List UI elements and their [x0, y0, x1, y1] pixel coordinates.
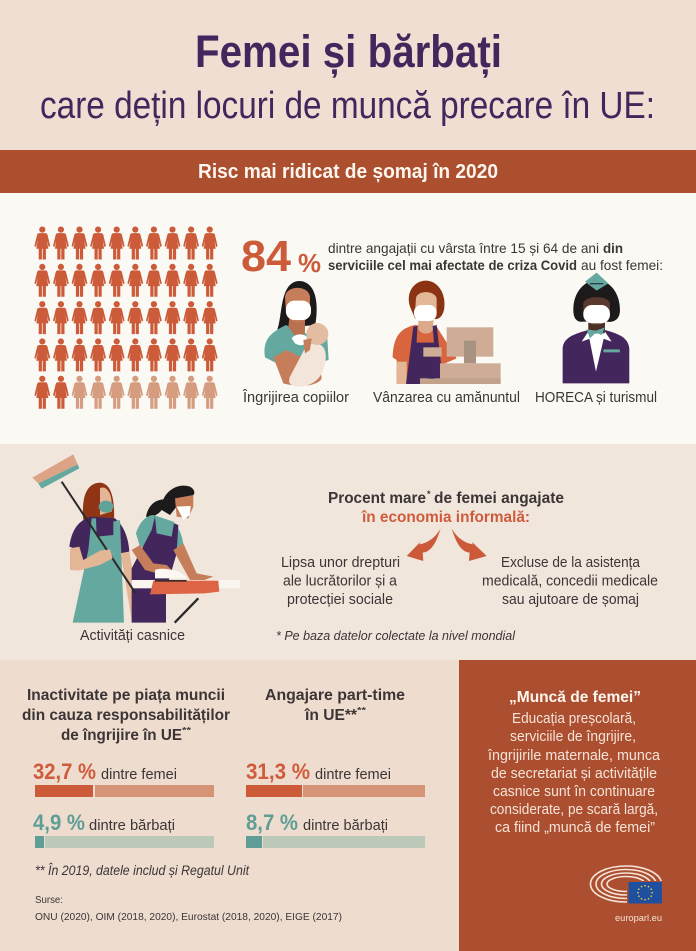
footnote: worldwide data: * Pe baza datelor colectate la nivel mondial: [276, 628, 516, 643]
heading: women's work: „Muncă de femei”: [509, 689, 641, 706]
arrow: right: [452, 528, 487, 561]
stat: inactive women 32,7 %: dintre femei: [101, 766, 177, 783]
text: excluded from medical support: [482, 555, 658, 608]
body text: ca fiind „muncă de femei”: [495, 820, 655, 836]
illustration: domestic workers: [32, 454, 240, 623]
sources: [35, 894, 342, 923]
body text: considerate, pe scară largă,: [490, 802, 658, 818]
body text: casnice sunt în continuare: [493, 784, 655, 800]
stat: part-time women 31,3 %: 31,3 %: [246, 759, 310, 784]
heading: informal economy: [328, 489, 564, 526]
heading: informal economy: în economia informală:: [361, 509, 530, 526]
icon labels: Îngrijirea copiilor: [242, 389, 349, 406]
body text: [487, 711, 661, 836]
heading: part-time employment: [265, 687, 405, 724]
big number 84 %: [241, 232, 321, 281]
icon labels: [242, 389, 657, 406]
logo: European Parliament: [590, 866, 663, 924]
stat: inactive men 4,9 %: [33, 810, 214, 848]
text: excluded from medical support: medicală, concedii medicale: [482, 574, 658, 590]
heading: informal economy: Procent mare: [328, 490, 426, 507]
caption: domestic activities: Activități casnice: [80, 628, 185, 644]
big number 84 %: %: [298, 248, 321, 278]
arrow: left: [407, 528, 441, 561]
heading: inactivity: Inactivitate pe piața muncii: [27, 687, 225, 704]
panel: statistics: [0, 660, 459, 951]
stat: part-time men 8,7 %: [246, 810, 425, 848]
panel: women's work: [459, 660, 696, 951]
statement text: [328, 240, 663, 273]
heading: inactivity: din cauza responsabilităților: [22, 707, 230, 724]
text: lack of rights: Lipsa unor drepturi: [281, 555, 400, 571]
heading: informal economy: *: [427, 489, 431, 499]
statement text: din: [603, 240, 623, 256]
stat: part-time women 31,3 %: dintre femei: [315, 766, 391, 783]
text: excluded from medical support: Excluse de la asistența: [501, 555, 641, 571]
title line 1: Femei și bărbați: [195, 26, 502, 77]
panel: 84 percent section: [0, 193, 696, 444]
heading: part-time employment: în UE**: [304, 707, 358, 724]
pictogram: 100 women, 84 highlighted: [34, 226, 218, 409]
statement text: dintre angajații cu vârsta între 15 și 64 de ani: [328, 240, 599, 256]
stat: inactive women 32,7 %: 32,7 %: [33, 759, 96, 784]
body text: de secretariat și activitățile: [491, 766, 657, 782]
text: lack of rights: protecției sociale: [287, 592, 393, 608]
banner: risk heading: Risc mai ridicat de șomaj în 2020: [198, 161, 498, 183]
panel: informal economy section: [0, 444, 696, 660]
sources: Surse:: [35, 894, 63, 906]
heading: inactivity: de îngrijire în UE: [61, 727, 182, 744]
body text: Educația preșcolară,: [512, 711, 636, 727]
text: lack of rights: [281, 555, 400, 608]
logo: European Parliament: europarl.eu: [615, 913, 662, 924]
big number 84 %: 84: [241, 232, 292, 281]
body text: serviciile de îngrijire,: [510, 729, 636, 745]
text: excluded from medical support: sau ajutoare de șomaj: [502, 592, 639, 608]
icon: childcare worker holding baby: [264, 281, 329, 387]
statement text: au fost femei:: [581, 257, 663, 273]
heading: inactivity: **: [182, 726, 192, 735]
stat: part-time women 31,3 %: [246, 759, 425, 797]
heading: informal economy: de femei angajate: [434, 490, 564, 507]
statement text: serviciile cel mai afectate de criza Covid: [328, 257, 577, 273]
text: lack of rights: ale lucrătorilor și a: [283, 574, 398, 590]
panel: title header: [0, 0, 696, 150]
stat: inactive men 4,9 %: dintre bărbați: [89, 817, 175, 834]
sources: ONU (2020), OIM (2018, 2020), Eurostat (2018, 2020), EIGE (2017): [35, 911, 342, 923]
stat: part-time men 8,7 %: dintre bărbați: [303, 817, 388, 834]
icon labels: Vânzarea cu amănuntul: [373, 390, 520, 406]
heading: inactivity: [22, 687, 230, 744]
banner: risk heading: [0, 150, 696, 193]
body text: îngrijirile maternale, munca: [487, 748, 661, 764]
icon: flight attendant: [563, 273, 629, 383]
icon labels: HORECA și turismul: [535, 390, 657, 406]
footnote: 2019 data: ** În 2019, datele includ și Regatul Unit: [35, 863, 250, 878]
stat: inactive women 32,7 %: [33, 759, 214, 797]
heading: part-time employment: **: [357, 706, 367, 715]
stat: part-time men 8,7 %: 8,7 %: [246, 810, 298, 835]
heading: part-time employment: Angajare part-time: [265, 687, 405, 704]
icon: retail worker at till: [393, 281, 501, 384]
stat: inactive men 4,9 %: 4,9 %: [33, 810, 85, 835]
